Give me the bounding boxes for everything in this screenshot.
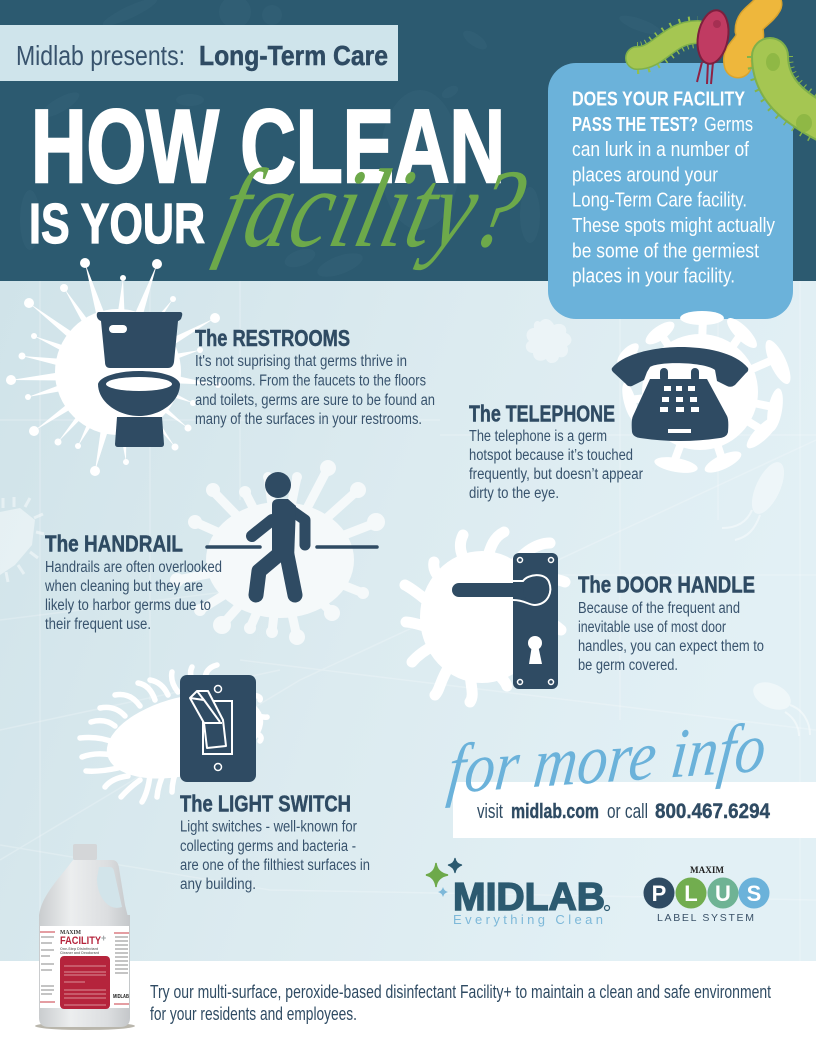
header band: [0, 0, 816, 282]
text: the handrail: when cleaning but they are: [44, 578, 203, 595]
panel: does your facility pass the test: [548, 63, 793, 319]
logo: Midlab: [426, 858, 610, 927]
text: the door handle: [578, 572, 764, 674]
text: the handrail: their frequent use.: [45, 616, 151, 633]
text: the handrail: [44, 530, 222, 633]
icon: door handle on white germ: [405, 532, 565, 702]
text: the door handle: Because of the frequent and: [578, 600, 740, 617]
icon: light switch on white germ: [80, 665, 272, 802]
text: the restrooms: [195, 325, 435, 428]
text: the restrooms: It's not suprising that germs thrive in: [195, 353, 407, 370]
text: the light switch: The LIGHT SWITCH: [180, 790, 351, 816]
icon: toilet on white splat: [6, 258, 221, 476]
logo: Maxim Plus label system: MAXIM: [690, 866, 724, 876]
logo: Midlab: MIDLAB: [453, 876, 605, 919]
callout: for more info: for more info: [444, 709, 770, 809]
text: the door handle: The DOOR HANDLE: [578, 572, 755, 598]
product: Facility+ jug: +: [101, 933, 106, 943]
icon: telephone on white germ: [612, 311, 795, 477]
text: the light switch: are one of the filthiest surfaces in: [180, 857, 370, 874]
panel: does your facility pass the test: can lurk in a number of: [572, 139, 749, 161]
text: the light switch: Light switches - well-known for: [180, 818, 357, 836]
logo: Midlab: Everything Clean: [453, 912, 603, 927]
callout: for more info: 800.467.6294: [655, 800, 770, 823]
logo: Maxim Plus label system: U: [715, 881, 731, 906]
text: the restrooms: The RESTROOMS: [195, 325, 350, 351]
panel: does your facility pass the test: PASS THE TEST?: [572, 114, 698, 136]
product: Facility+ jug: One-Step Disinfectant: [60, 947, 99, 951]
text: the telephone: [469, 400, 643, 502]
title: IS YOUR: [29, 192, 205, 256]
icon: person at handrail on white germ: [170, 460, 385, 645]
text: the telephone: The TELEPHONE: [469, 400, 615, 426]
logo: Maxim Plus label system: L: [684, 881, 698, 906]
product: Facility+ jug: MIDLAB: [113, 994, 129, 1000]
text: the telephone: frequently, but doesn’t appear: [469, 466, 643, 483]
banner: Midlab presents: [0, 25, 398, 81]
callout: for more info: visit: [477, 801, 503, 823]
panel: does your facility pass the test: DOES YOUR FACILITY: [572, 88, 746, 110]
text: footer product message: [150, 982, 771, 1024]
text: the telephone: dirty to the eye.: [469, 485, 559, 502]
title: [29, 89, 537, 271]
tiled background: [0, 281, 816, 961]
logo: Maxim Plus label system: P: [652, 881, 666, 906]
text: the door handle: inevitable use of most door: [578, 619, 726, 636]
text: the telephone: The telephone is a germ: [469, 428, 607, 445]
panel: does your facility pass the test: Long-Term Care facility.: [572, 190, 747, 212]
panel: does your facility pass the test: places around your: [572, 164, 718, 186]
callout: for more info: midlab.com: [511, 801, 599, 823]
product: Facility+ jug: MAXIM: [60, 930, 81, 936]
text: the light switch: any building.: [180, 876, 256, 893]
text: the light switch: [180, 790, 370, 893]
panel: does your facility pass the test: places in your facility.: [572, 266, 735, 288]
product: Facility+ jug: Cleaner and Deodorant: [60, 951, 100, 955]
text: the restrooms: many of the surfaces in your restrooms.: [195, 411, 422, 428]
panel: does your facility pass the test: be some of the germiest: [572, 240, 759, 262]
panel: does your facility pass the test: Germs: [704, 114, 753, 136]
white footer band: [0, 961, 816, 1056]
icon: cartoon germs: [637, 4, 816, 132]
logo: Maxim Plus label system: LABEL SYSTEM: [657, 912, 754, 924]
product: Facility+ jug: FACILITY: [60, 935, 102, 947]
title: HOW CLEAN: [31, 89, 505, 205]
text: the handrail: The HANDRAIL: [45, 530, 183, 556]
title: facility?: [208, 147, 537, 271]
logo: Maxim Plus label system: [644, 866, 770, 924]
text: footer product message: for your residents and employees.: [150, 1004, 357, 1024]
text: the handrail: likely to harbor germs due to: [45, 597, 211, 614]
text: the door handle: handles, you can expect them to: [578, 638, 764, 655]
banner: Midlab presents: Midlab presents:: [16, 40, 185, 71]
text: the telephone: hotspot because it’s touched: [469, 447, 633, 464]
text: the door handle: be germ covered.: [578, 657, 678, 674]
text: the restrooms: restrooms. From the faucets to the floors: [195, 372, 426, 390]
callout: for more info: or call: [607, 801, 648, 823]
text: the restrooms: and toilets, germs are sure to be found an: [195, 392, 435, 409]
faint background germs: [0, 319, 810, 736]
logo: Maxim Plus label system: S: [747, 881, 761, 906]
text: the handrail: Handrails are often overlooked: [45, 559, 222, 576]
text: the light switch: collecting germs and bacteria -: [180, 838, 356, 855]
panel: does your facility pass the test: These spots might actually: [572, 215, 775, 237]
product: Facility+ jug: [35, 844, 135, 1030]
banner: Midlab presents: Long-Term Care: [199, 40, 388, 71]
